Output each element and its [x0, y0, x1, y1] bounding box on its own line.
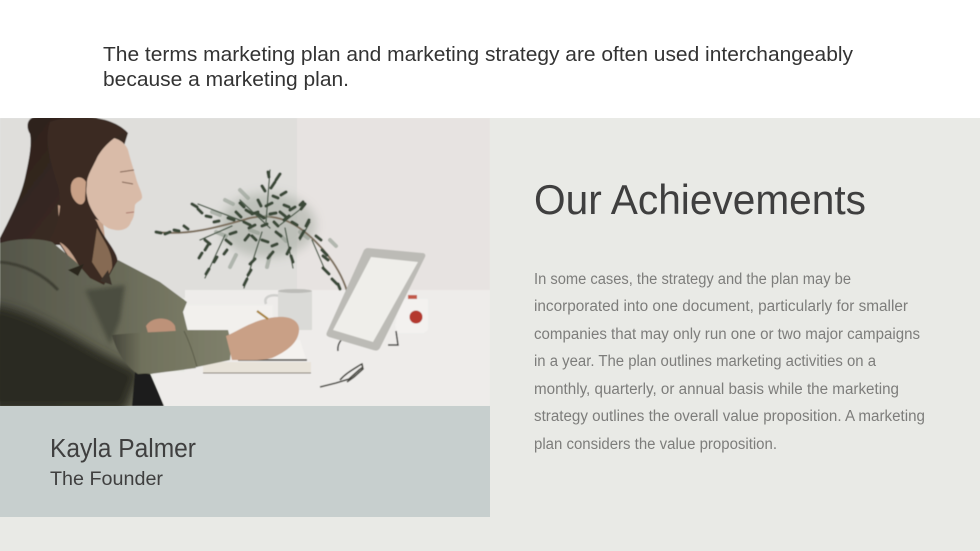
woman: shirt shadows: [0, 262, 164, 410]
woman: facial features: [120, 170, 134, 213]
photo wall: [0, 118, 346, 298]
icon: notebook: [202, 358, 312, 374]
photo: woman writing at a desk: [0, 118, 428, 406]
heading: Our Achievements: [534, 176, 866, 223]
photo desk: [152, 290, 490, 406]
icon: plant: [156, 170, 347, 291]
woman: hair back: [0, 118, 128, 256]
panel: achievements background: [0, 118, 980, 551]
woman: writing hand: [226, 317, 299, 360]
woman: face: [86, 137, 142, 230]
icon: power cube: [408, 294, 423, 324]
body text: monthly, quarterly, or annual basis while the marketing: [534, 381, 899, 398]
icon: pencil: [257, 311, 268, 319]
icon: mug: [265, 289, 312, 330]
body text: plan considers the value proposition.: [534, 436, 777, 453]
woman: sleeve: [112, 330, 231, 374]
intro text: because a marketing plan.: [103, 68, 349, 91]
panel: name caption: [0, 406, 490, 517]
body text: [534, 271, 925, 453]
icon: tablet: [326, 248, 425, 351]
woman: [0, 116, 299, 410]
icon: glasses: [320, 364, 363, 387]
body text: companies that may only run one or two major campaigns: [534, 326, 920, 343]
intro text: The terms marketing plan and marketing strategy are often used interchangeably: [103, 43, 854, 66]
body text: incorporated into one document, particularly for smaller: [534, 298, 908, 315]
woman: far hand: [146, 318, 176, 333]
body text: in a year. The plan outlines marketing activities on a: [534, 353, 876, 370]
body text: strategy outlines the overall value proposition. A marketing: [534, 408, 925, 425]
woman: ear: [71, 177, 86, 204]
woman: shirt: [0, 239, 196, 406]
woman: neck: [57, 204, 106, 264]
intro text: [103, 43, 854, 91]
name: Kayla Palmer: [50, 435, 196, 463]
woman: hair front: [48, 117, 127, 288]
role: The Founder: [50, 468, 164, 490]
body text: In some cases, the strategy and the plan may be: [534, 271, 851, 288]
